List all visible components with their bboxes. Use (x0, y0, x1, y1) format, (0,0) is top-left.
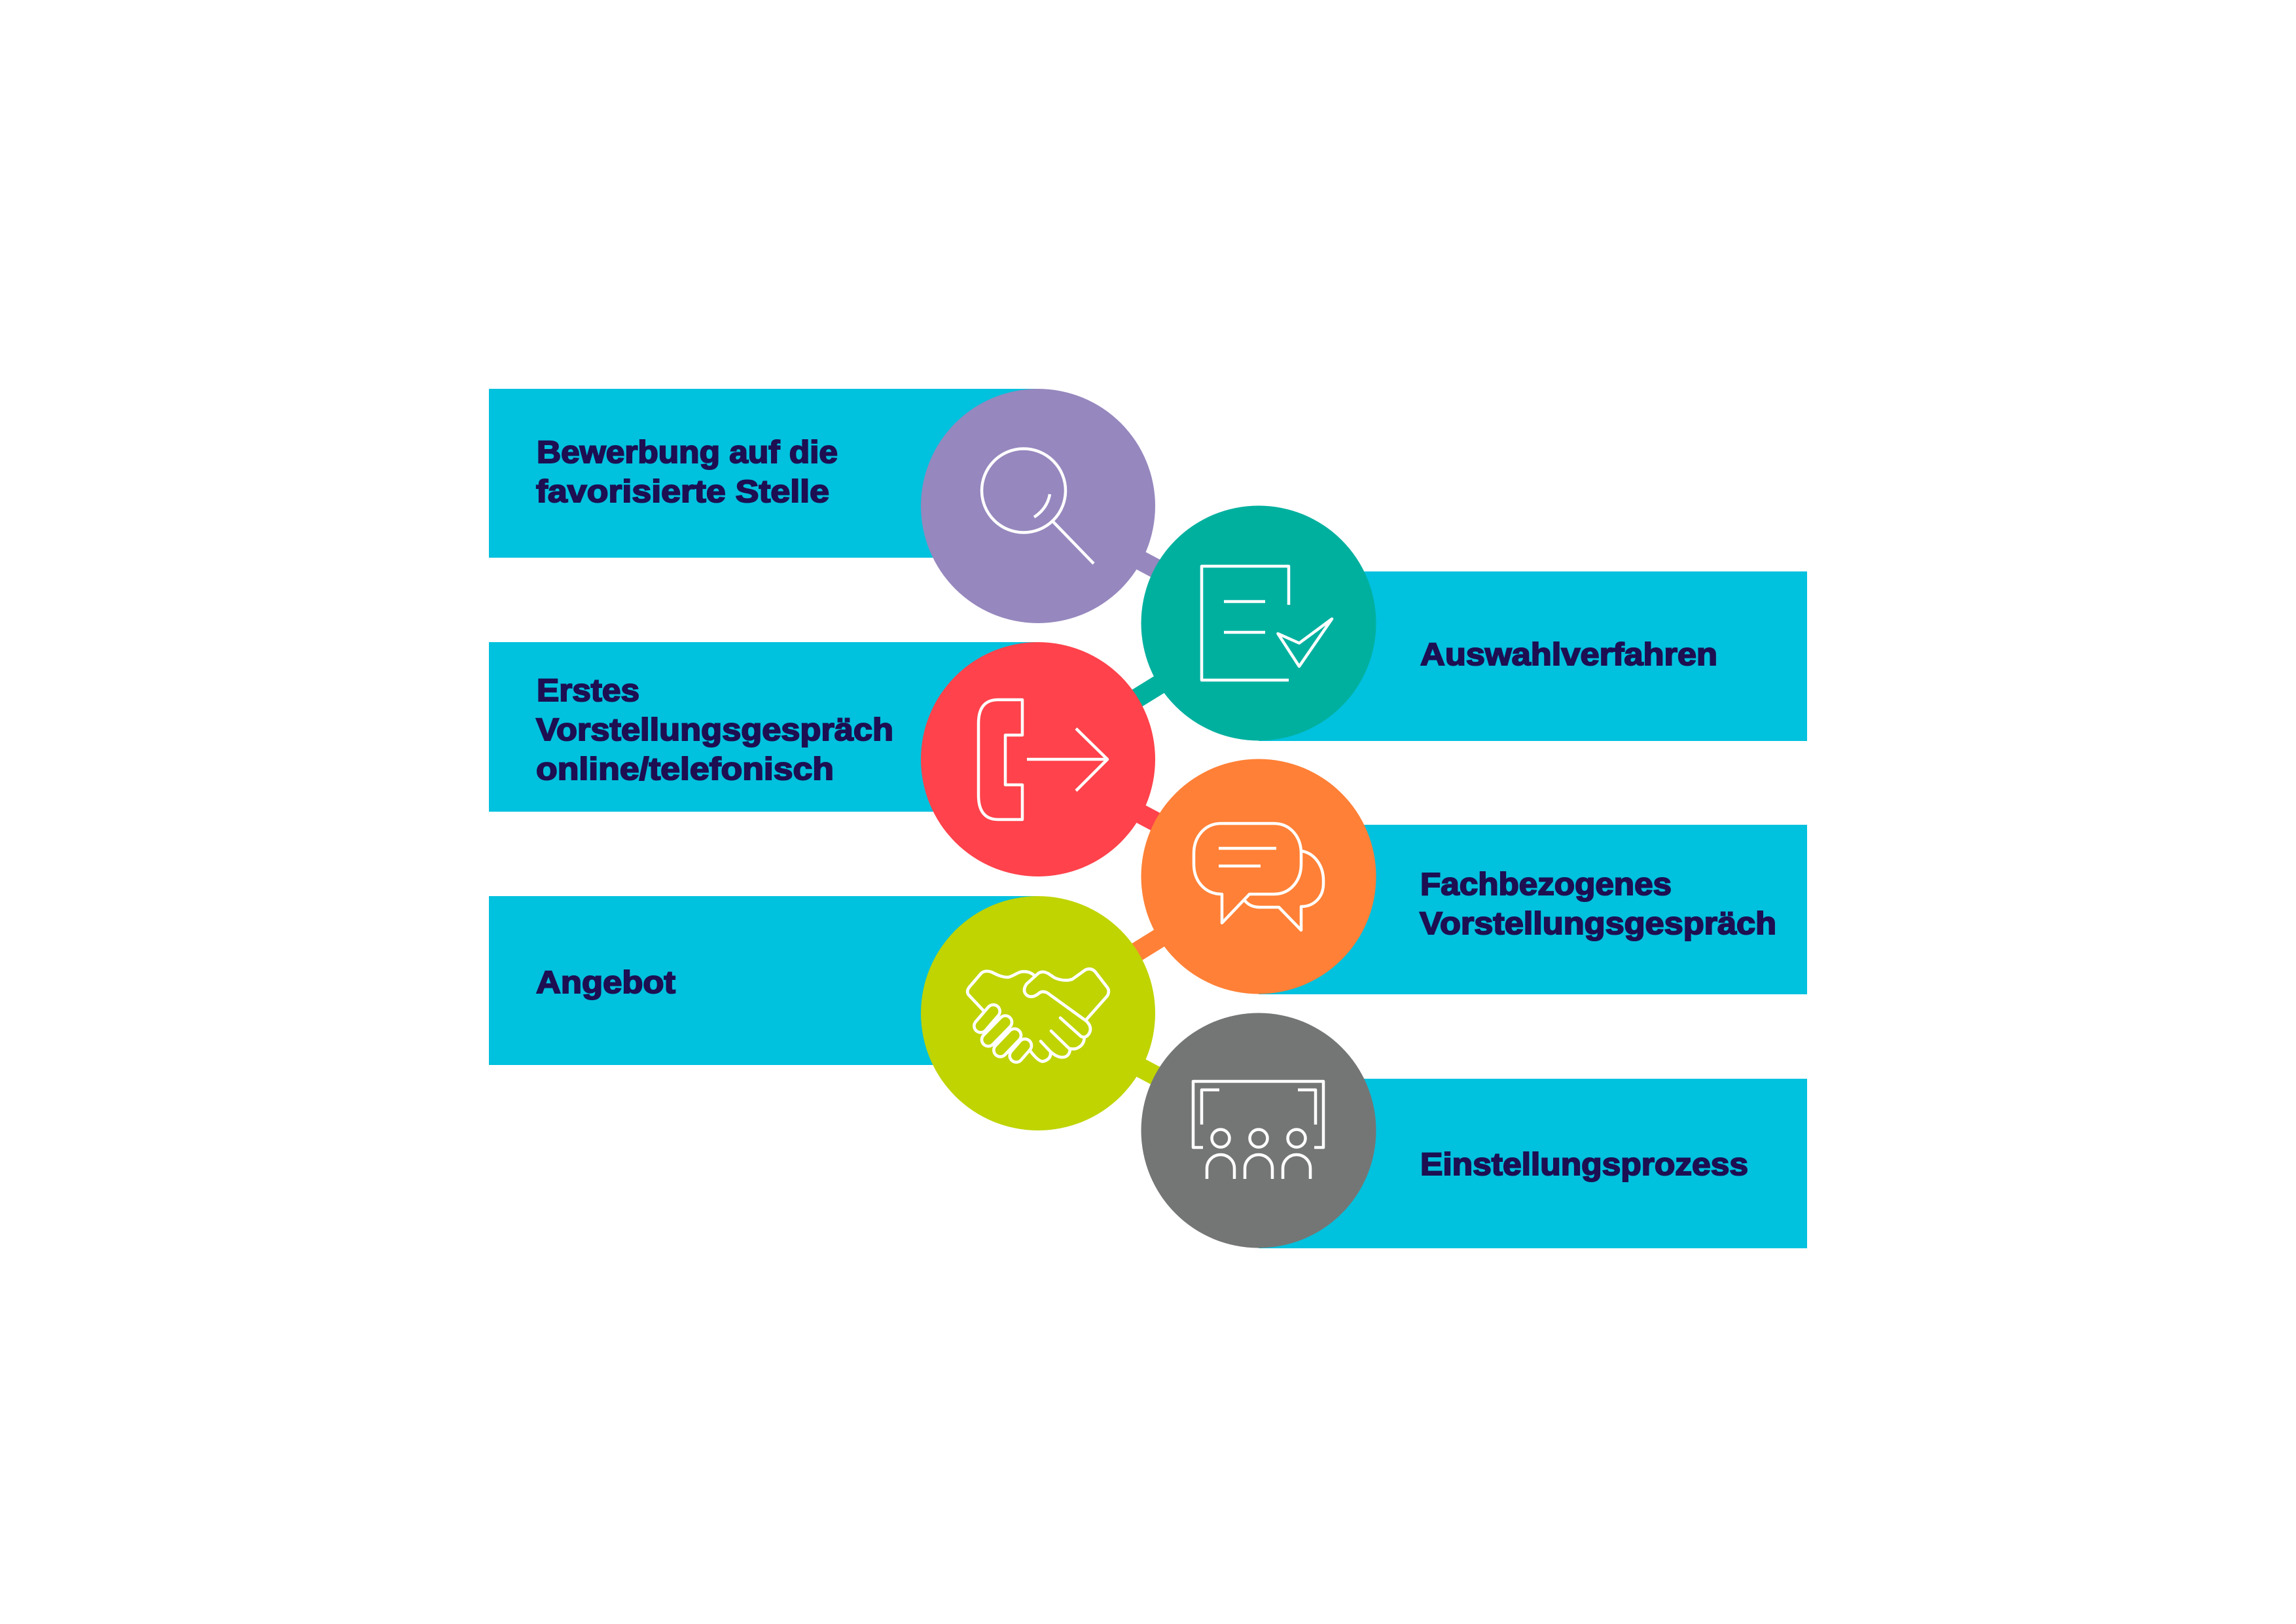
circle: lime (921, 896, 1155, 1130)
label: Erstes Vorstellungsgespräch online/telefonisch (536, 674, 893, 787)
icon: phone with arrow (978, 700, 1107, 820)
label: Auswahlverfahren: Auswahlverfahren (1420, 638, 1717, 672)
label: Bewerbung auf die favorisierte Stelle: Bewerbung auf die (537, 435, 838, 470)
label: Erstes Vorstellungsgespräch online/telefonisch: Erstes (537, 674, 639, 708)
bar: Bewerbung (489, 389, 1038, 558)
circle: red (921, 642, 1155, 876)
icon: handshake (967, 969, 1109, 1062)
label: Fachbezogenes Vorstellungsgespräch: Fachbezogenes (1420, 867, 1672, 902)
connector: teal to red (1038, 623, 1259, 759)
connector: red to orange (1038, 759, 1259, 876)
bar: Auswahlverfahren (1259, 571, 1807, 741)
icon: document with check mark (1202, 566, 1332, 680)
circle: teal (1141, 505, 1376, 741)
label: Erstes Vorstellungsgespräch online/telefonisch: online/telefonisch (536, 752, 834, 787)
icon: magnifying glass (982, 449, 1094, 564)
label: Fachbezogenes Vorstellungsgespräch: Vorstellungsgespräch (1420, 907, 1776, 941)
connector: purple to teal (1038, 506, 1259, 623)
circle: gray (1141, 1013, 1376, 1248)
label: Bewerbung auf die favorisierte Stelle: favorisierte Stelle (536, 475, 829, 509)
circle: purple (921, 389, 1155, 623)
label: Einstellungsprozess: Einstellungsprozess (1420, 1147, 1748, 1182)
label: Angebot: Angebot (536, 965, 675, 1000)
bar: Erstes Vorstellungsgespräch (489, 642, 1038, 812)
bar: Angebot (489, 896, 1038, 1065)
bar: Einstellungsprozess (1259, 1079, 1807, 1248)
label: Bewerbung auf die favorisierte Stelle (536, 435, 838, 509)
connector: orange to lime (1038, 876, 1259, 1013)
circle: orange (1141, 759, 1376, 994)
connector: lime to gray (1038, 1013, 1259, 1130)
icon: audience in front of screen (1193, 1081, 1323, 1179)
icon: speech bubbles (1194, 823, 1323, 930)
label: Fachbezogenes Vorstellungsgespräch (1420, 867, 1776, 941)
bar: Fachbezogenes Vorstellungsgespräch (1259, 825, 1807, 994)
label: Erstes Vorstellungsgespräch online/telefonisch: Vorstellungsgespräch (536, 713, 893, 748)
